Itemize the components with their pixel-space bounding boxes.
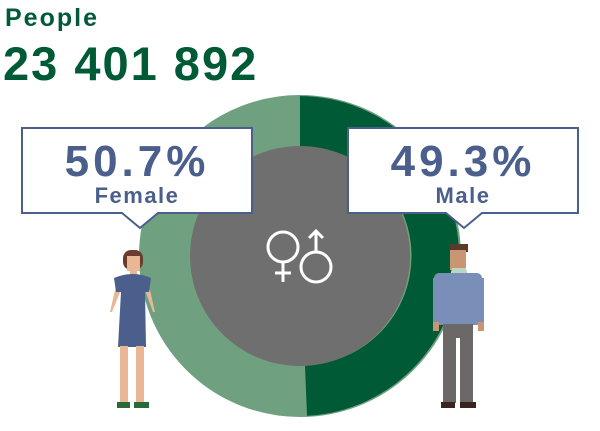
- icon: gender symbols: [268, 231, 331, 282]
- figure: woman: [110, 250, 155, 408]
- callout: male: [348, 128, 578, 228]
- callout: male: 49.3%: [391, 137, 535, 186]
- callout: male: Male: [436, 183, 490, 208]
- callout: female: [22, 128, 252, 228]
- callout: female: Female: [95, 183, 179, 208]
- title: People: People: [5, 4, 99, 32]
- donut chart: [165, 96, 459, 416]
- total population number: 23 401 892: [3, 37, 258, 90]
- figure: man: [433, 244, 484, 408]
- callout: female: 50.7%: [65, 137, 209, 186]
